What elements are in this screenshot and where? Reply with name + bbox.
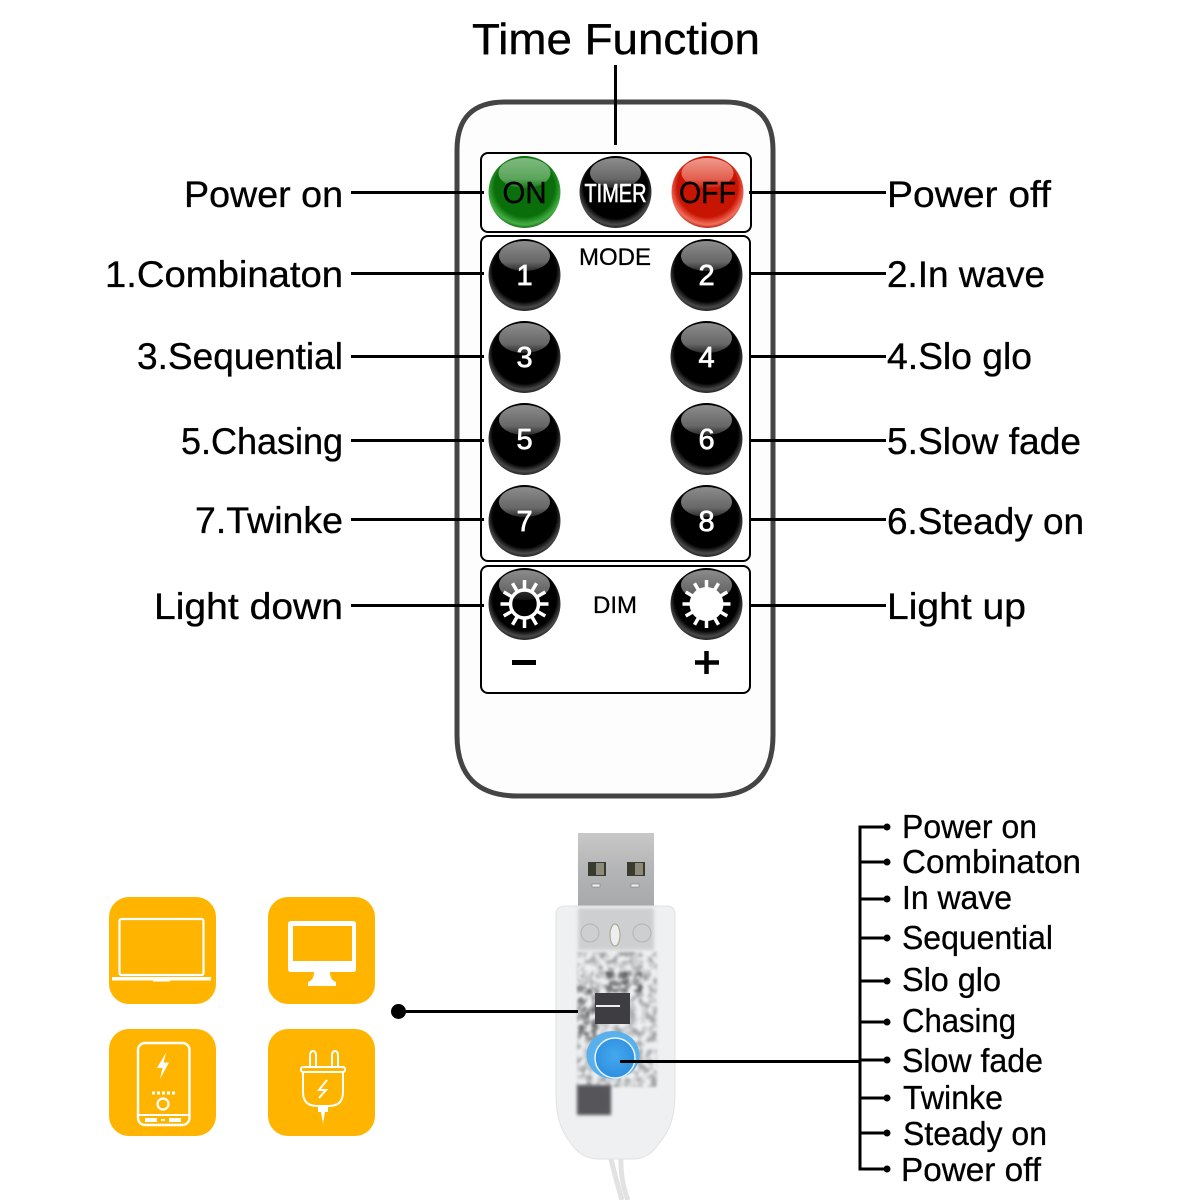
label: sequential: 3.Sequential xyxy=(137,336,343,377)
label: light down: Light down xyxy=(154,586,343,627)
dim label: DIM xyxy=(593,592,637,619)
icon: monitor xyxy=(268,897,375,1004)
title: Time Function xyxy=(472,15,760,64)
button 1 xyxy=(488,239,560,311)
button 2: 2 xyxy=(698,260,715,292)
usb metal inner xyxy=(578,908,654,950)
label: slow fade: 5.Slow fade xyxy=(887,421,1081,462)
button 4: 4 xyxy=(698,342,715,374)
usb circuit board xyxy=(577,952,657,1115)
button: light up xyxy=(670,568,742,640)
button 3 xyxy=(488,321,560,393)
label: light down xyxy=(154,586,484,627)
button 7 xyxy=(488,485,560,557)
list text: Sequential xyxy=(902,919,1053,956)
connector: button to bracket xyxy=(620,1060,860,1063)
pointer: time function xyxy=(614,65,617,145)
plus sign xyxy=(695,651,719,674)
connector: power sources to usb xyxy=(391,1004,578,1019)
label: twinke xyxy=(195,500,484,541)
button: off: OFF xyxy=(679,175,736,210)
usb blue button xyxy=(586,1031,640,1079)
label: power on xyxy=(184,174,484,215)
button: timer xyxy=(580,156,652,228)
label: light up: Light up xyxy=(887,586,1026,627)
bracket dots xyxy=(884,824,890,1172)
list text: Twinke xyxy=(903,1079,1003,1116)
label: steady on xyxy=(749,501,1084,542)
button: on xyxy=(488,156,560,228)
list text: Combinaton xyxy=(902,843,1081,880)
button: timer: TIMER xyxy=(584,178,647,208)
panel: dim xyxy=(481,566,750,693)
label: combination: 1.Combinaton xyxy=(105,254,343,295)
label: power off xyxy=(749,174,1052,215)
button 7: 7 xyxy=(516,506,533,538)
button: on: ON xyxy=(502,175,546,210)
mode list with bracket xyxy=(620,808,1081,1188)
icon: plug xyxy=(268,1029,375,1136)
usb metal plug xyxy=(578,833,654,906)
panel: power and timer xyxy=(481,153,751,232)
label: in wave xyxy=(749,254,1045,295)
button 5: 5 xyxy=(516,424,533,456)
button 3: 3 xyxy=(516,342,533,374)
usb controller xyxy=(556,833,675,1200)
label: steady on: 6.Steady on xyxy=(887,501,1084,542)
remote body xyxy=(457,102,773,796)
label: slo glo: 4.Slo glo xyxy=(887,336,1032,377)
usb cable xyxy=(610,1155,628,1200)
icon: power bank xyxy=(109,1029,216,1136)
label: sequential xyxy=(137,336,484,377)
label: chasing: 5.Chasing xyxy=(181,421,343,462)
mode label: MODE xyxy=(579,244,651,271)
bracket xyxy=(860,827,887,1169)
button 1: 1 xyxy=(516,260,533,292)
icon: laptop xyxy=(109,897,216,1004)
list text: Power off xyxy=(901,1151,1042,1188)
list text: Chasing xyxy=(902,1002,1016,1039)
label: light up xyxy=(749,586,1026,627)
button: light down xyxy=(488,568,560,640)
list text: Slow fade xyxy=(902,1042,1043,1079)
label: twinke: 7.Twinke xyxy=(195,500,343,541)
button 6: 6 xyxy=(698,424,715,456)
list text xyxy=(901,808,1081,1188)
label: slow fade xyxy=(749,421,1081,462)
button 8: 8 xyxy=(698,506,715,538)
remote control xyxy=(457,102,773,796)
button 5 xyxy=(488,403,560,475)
list text: Power on xyxy=(902,808,1037,845)
label: slo glo xyxy=(749,336,1032,377)
label: power on: Power on xyxy=(184,174,343,215)
usb translucent body xyxy=(556,906,675,1159)
list text: In wave xyxy=(902,879,1012,916)
list text: Steady on xyxy=(903,1115,1047,1152)
button 6 xyxy=(670,403,742,475)
button 2 xyxy=(670,239,742,311)
panel: mode xyxy=(481,236,750,561)
minus sign xyxy=(512,660,536,665)
button 4 xyxy=(670,321,742,393)
label: power off: Power off xyxy=(887,174,1052,215)
label: in wave: 2.In wave xyxy=(887,254,1045,295)
button: off xyxy=(672,156,744,228)
power source icons xyxy=(109,897,375,1136)
left labels xyxy=(105,174,484,627)
label: combination xyxy=(105,254,484,295)
button 8 xyxy=(670,485,742,557)
list text: Slo glo xyxy=(902,961,1001,998)
label: chasing xyxy=(181,421,484,462)
right labels xyxy=(749,174,1084,627)
